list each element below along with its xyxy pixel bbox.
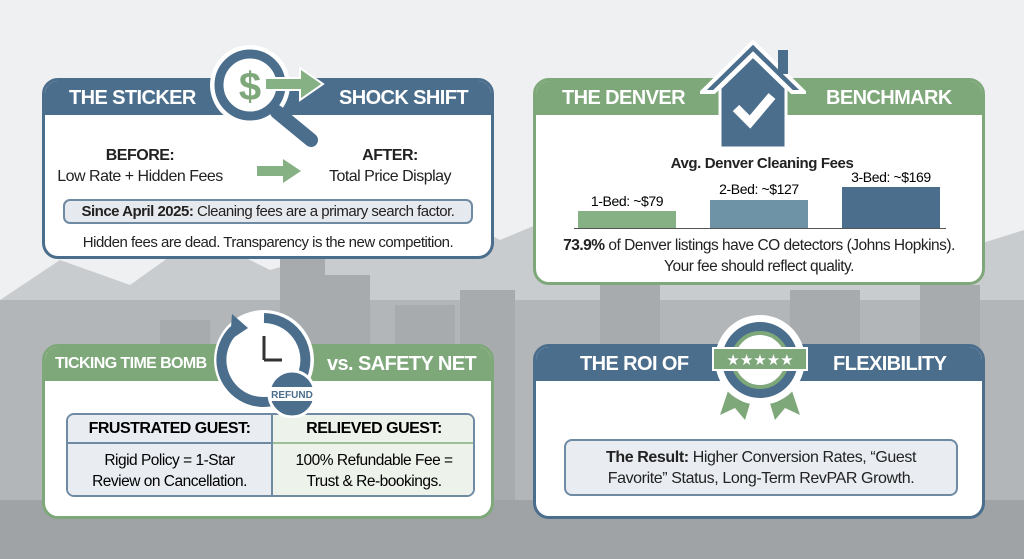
heading: BENCHMARK	[826, 87, 952, 109]
icon: house with check	[700, 40, 806, 146]
bar chart: 2-Bed: ~$127	[719, 181, 799, 197]
comparison table	[66, 413, 475, 497]
heading: THE ROI OF	[580, 353, 688, 375]
icon: clock with refund	[214, 310, 314, 418]
result callout: Favorite” Status, Long-Term RevPAR Growth.	[608, 470, 914, 487]
after text	[329, 147, 452, 185]
result callout	[564, 439, 958, 496]
bottom text: Hidden fees are dead. Transparency is the new competition.	[83, 234, 453, 251]
relieved guest column: Trust & Re-bookings.	[306, 473, 442, 490]
icon: award badge: ★★★★★	[726, 351, 794, 369]
frustrated guest column: FRUSTRATED GUEST:	[89, 420, 250, 437]
heading: vs. SAFETY NET	[327, 353, 476, 375]
before text	[57, 147, 223, 185]
callout box	[63, 199, 473, 224]
heading	[45, 81, 491, 115]
relieved guest column: RELIEVED GUEST:	[306, 420, 442, 437]
panel: roi of flexibility	[533, 344, 985, 519]
after text: Total Price Display	[329, 168, 451, 185]
relieved guest column: 100% Refundable Fee =	[295, 452, 453, 469]
arrow	[257, 159, 301, 183]
heading: THE DENVER	[562, 87, 685, 109]
icon: magnifier with dollar	[210, 45, 325, 147]
bar chart	[574, 155, 946, 229]
callout box: Since April 2025: Cleaning fees are a primary search factor.	[82, 203, 454, 220]
before text: BEFORE:	[106, 147, 174, 164]
icon: magnifier with dollar: $	[239, 65, 261, 109]
footnote text	[563, 237, 955, 275]
heading: THE STICKER	[69, 87, 196, 109]
panel: denver benchmark	[533, 78, 985, 285]
panel: sticker shock shift	[42, 78, 494, 259]
frustrated guest column: Review on Cancellation.	[92, 473, 247, 490]
frustrated guest column: Rigid Policy = 1-Star	[104, 452, 235, 469]
heading: TICKING TIME BOMB	[55, 355, 207, 372]
heading	[45, 347, 491, 381]
bar chart: 1-Bed: ~$79	[591, 193, 663, 209]
icon: clock with refund: REFUND	[271, 390, 313, 401]
before text: Low Rate + Hidden Fees	[57, 168, 223, 185]
heading: SHOCK SHIFT	[339, 87, 468, 109]
relieved guest column	[273, 415, 475, 495]
heading	[536, 347, 982, 381]
icon: award badge	[712, 315, 808, 420]
footnote text: 73.9% of Denver listings have CO detectors (Johns Hopkins).	[563, 237, 955, 254]
bar chart: Avg. Denver Cleaning Fees	[671, 155, 853, 172]
result callout: The Result: Higher Conversion Rates, “Guest	[606, 449, 916, 466]
footnote text: Your fee should reflect quality.	[664, 258, 854, 275]
frustrated guest column	[68, 415, 273, 495]
bar chart: 3-Bed: ~$169	[851, 169, 931, 185]
heading	[536, 81, 982, 115]
after text: AFTER:	[362, 147, 418, 164]
heading: FLEXIBILITY	[833, 353, 946, 375]
panel: ticking time bomb vs safety net	[42, 344, 494, 519]
